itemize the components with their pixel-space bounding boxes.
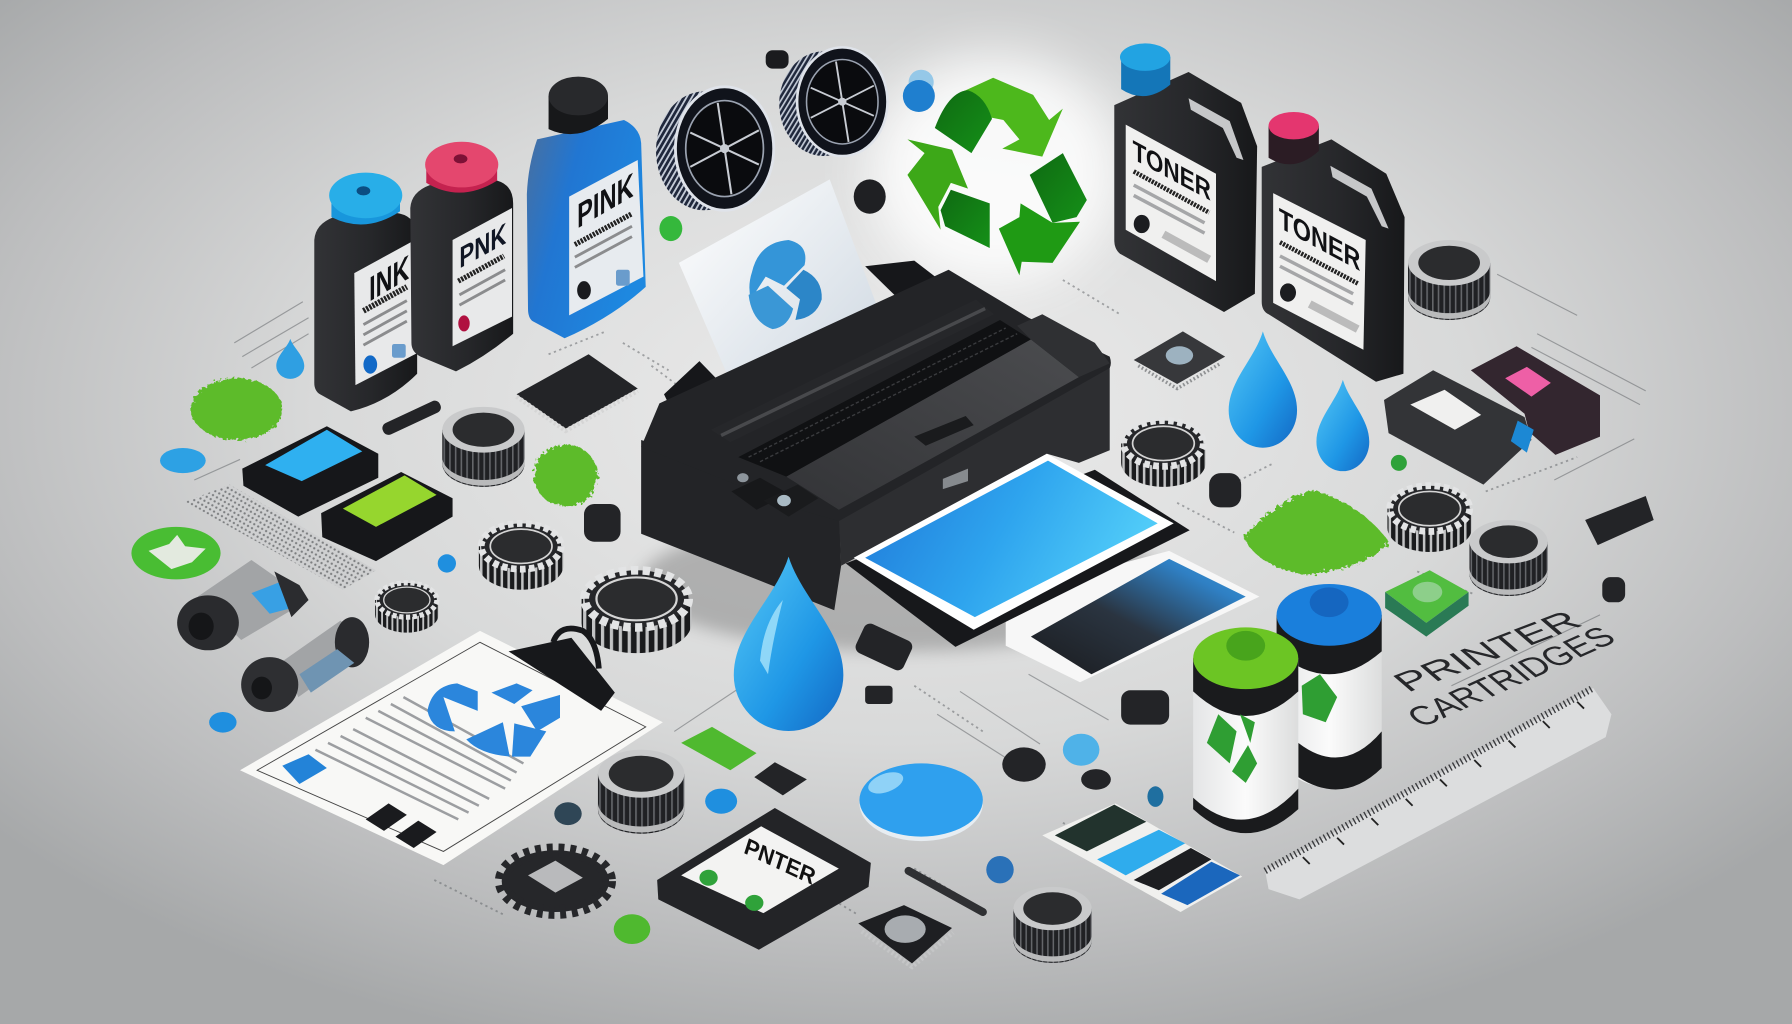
printer logo plate [943, 469, 968, 489]
report recycle icon [427, 683, 560, 757]
blue can [1277, 584, 1382, 789]
green block [1385, 570, 1469, 637]
printer cartridge box: PNTER [741, 833, 819, 890]
chip right [1134, 331, 1225, 389]
bottle: INK: INK [369, 247, 409, 309]
bottle: PINK black [410, 142, 513, 371]
bottle: INK [314, 173, 417, 411]
small cap top [766, 50, 789, 69]
swatch strip [1042, 803, 1242, 912]
bottle: TONER 1: TONER [1133, 134, 1211, 207]
drop upper right [1316, 380, 1369, 471]
document: clipboard report [240, 629, 663, 865]
wheel right [779, 47, 887, 156]
white border sheet [854, 454, 1174, 630]
icon: recycle green [907, 78, 1087, 275]
ink cartridge dark [1384, 370, 1531, 485]
printer top panel [786, 339, 1079, 510]
blue gem disc [859, 763, 983, 841]
wheel left [656, 87, 774, 210]
drop large [734, 557, 843, 731]
bottle: TONER 1 [1114, 43, 1257, 312]
bottle: TONER 2: TONER [1279, 202, 1360, 277]
printer control buttons [731, 473, 818, 517]
ink pads [242, 426, 453, 561]
recycling disc [131, 527, 221, 579]
rings and gears [375, 240, 1548, 963]
bar [909, 871, 983, 912]
printer cover bar [711, 299, 994, 442]
lower sheet [1006, 551, 1259, 682]
blue printed sheet [865, 461, 1158, 617]
chip lower [858, 905, 953, 967]
bottle: PINK black: PNK [459, 216, 506, 275]
drop upper left [1229, 331, 1297, 448]
bottle: PINK blue: PINK [577, 165, 634, 236]
printer cartridge box [657, 808, 871, 950]
shadow: printer [640, 514, 1166, 651]
label: Printer Cartridges: CARTRIDGES [1399, 621, 1624, 733]
mesh strip [185, 485, 376, 590]
glow behind recycling symbol [869, 57, 1120, 286]
scattered detail marks [194, 274, 1646, 914]
small black parts [380, 399, 1654, 825]
bottle: TONER 2 [1262, 112, 1405, 382]
chip left [517, 354, 638, 431]
printer side panel [1017, 314, 1110, 377]
bottle: PINK blue [527, 77, 646, 338]
printer roller slot [738, 320, 1031, 477]
cartridge roll one [177, 560, 309, 650]
black tray [846, 470, 1190, 647]
drop small left [276, 339, 304, 379]
report clip [509, 629, 615, 711]
gear black [502, 850, 609, 912]
ruler [1265, 688, 1611, 899]
report text lines [315, 697, 523, 819]
moss green [191, 378, 1389, 575]
printer left face [641, 440, 841, 610]
blue clip [160, 448, 206, 473]
printer right face [839, 363, 1110, 566]
black knob [854, 179, 886, 214]
rollers behind printer [664, 261, 954, 440]
small blue dots [209, 455, 1407, 944]
printer back deck [641, 270, 1111, 521]
cartridge roll two [241, 617, 369, 712]
blue ball [903, 70, 935, 112]
document: paper with blue icon [679, 179, 883, 400]
printer [641, 270, 1111, 610]
output sheets [846, 454, 1259, 682]
green ticket [681, 727, 757, 770]
printer handle [914, 416, 974, 446]
label: Printer Cartridges: PRINTER [1385, 606, 1590, 698]
green can [1193, 627, 1298, 833]
ink cartridge pink [1471, 346, 1600, 455]
green bead [659, 216, 682, 241]
